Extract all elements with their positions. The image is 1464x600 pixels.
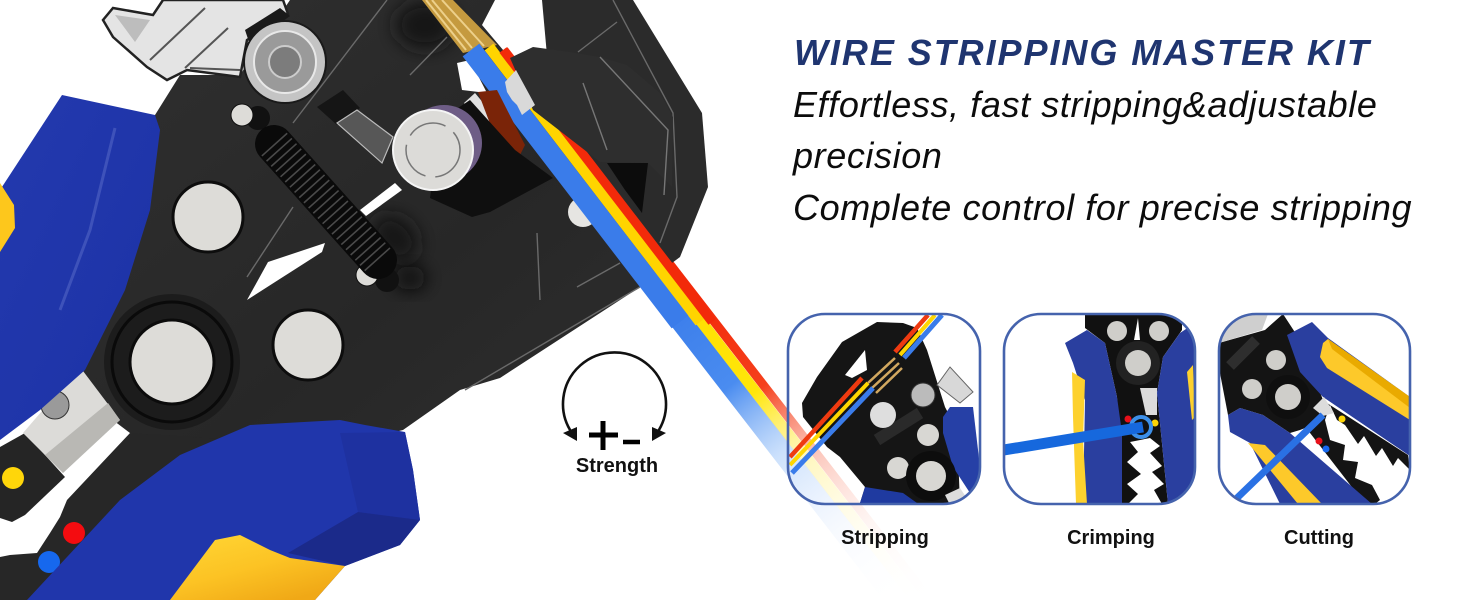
- outer jaw shell: [542, 0, 708, 287]
- blue insulation: [471, 50, 680, 322]
- light fading wire trail: [471, 50, 939, 600]
- crimping frame: [1004, 314, 1195, 504]
- cutting label: Cutting: [1284, 527, 1354, 549]
- body copy: [792, 84, 1412, 228]
- strength adjustment icon: Strength: [576, 455, 658, 477]
- lower jaw: [0, 433, 240, 600]
- panel: crimping: [1004, 314, 1195, 549]
- upper jaw stub: [0, 433, 65, 522]
- lower wire clamp: [464, 93, 500, 136]
- upper jaw clamp: [510, 47, 673, 187]
- silver block: [23, 367, 120, 473]
- crimping label: Crimping: [1067, 527, 1155, 549]
- lower handle underside: [288, 512, 420, 566]
- panel: stripping: [788, 314, 980, 549]
- stripping illustration: [790, 315, 980, 505]
- cutting frame: [1219, 314, 1410, 504]
- cutting illustration: [1219, 314, 1410, 504]
- upper blue handle: [0, 95, 160, 440]
- upper handle highlight: [60, 128, 115, 310]
- lower handle yellow grip: [170, 535, 345, 600]
- plate seams and gaps: [247, 0, 677, 390]
- lower blue handle: [27, 420, 420, 600]
- serrated clamp teeth: [505, 70, 535, 115]
- pivot ring: [104, 294, 240, 430]
- spring: [274, 144, 378, 260]
- body copy: Complete control for precise stripping: [793, 187, 1412, 228]
- body copy: precision: [792, 135, 942, 176]
- heading: WIRE STRIPPING MASTER KIT: [794, 32, 1372, 73]
- clear knob: [244, 21, 326, 103]
- hidden rivet: [568, 197, 598, 227]
- upper handle yellow grip: [0, 183, 15, 252]
- pivot rivet: [130, 320, 214, 404]
- adjustment knob: [393, 105, 482, 190]
- body copy: Effortless, fast stripping&adjustable: [793, 84, 1378, 125]
- colour dots: [2, 467, 85, 573]
- glass tube: [317, 90, 393, 163]
- strength adjustment icon: [563, 352, 666, 477]
- product photo: wire stripper tool: [0, 0, 712, 600]
- wire core and insulated conductors: [422, 0, 712, 322]
- stripping frame: [788, 314, 980, 504]
- panel: cutting: [1219, 314, 1410, 549]
- pins: [231, 104, 399, 292]
- steel plate: [60, 0, 640, 470]
- rivet: [173, 182, 243, 252]
- lower handle end face: [340, 432, 420, 520]
- clear plastic cap: [103, 0, 290, 80]
- crimping illustration: [1004, 314, 1195, 504]
- stripping label: Stripping: [841, 527, 929, 549]
- second rivet: [273, 310, 343, 380]
- knob mount: [430, 100, 553, 217]
